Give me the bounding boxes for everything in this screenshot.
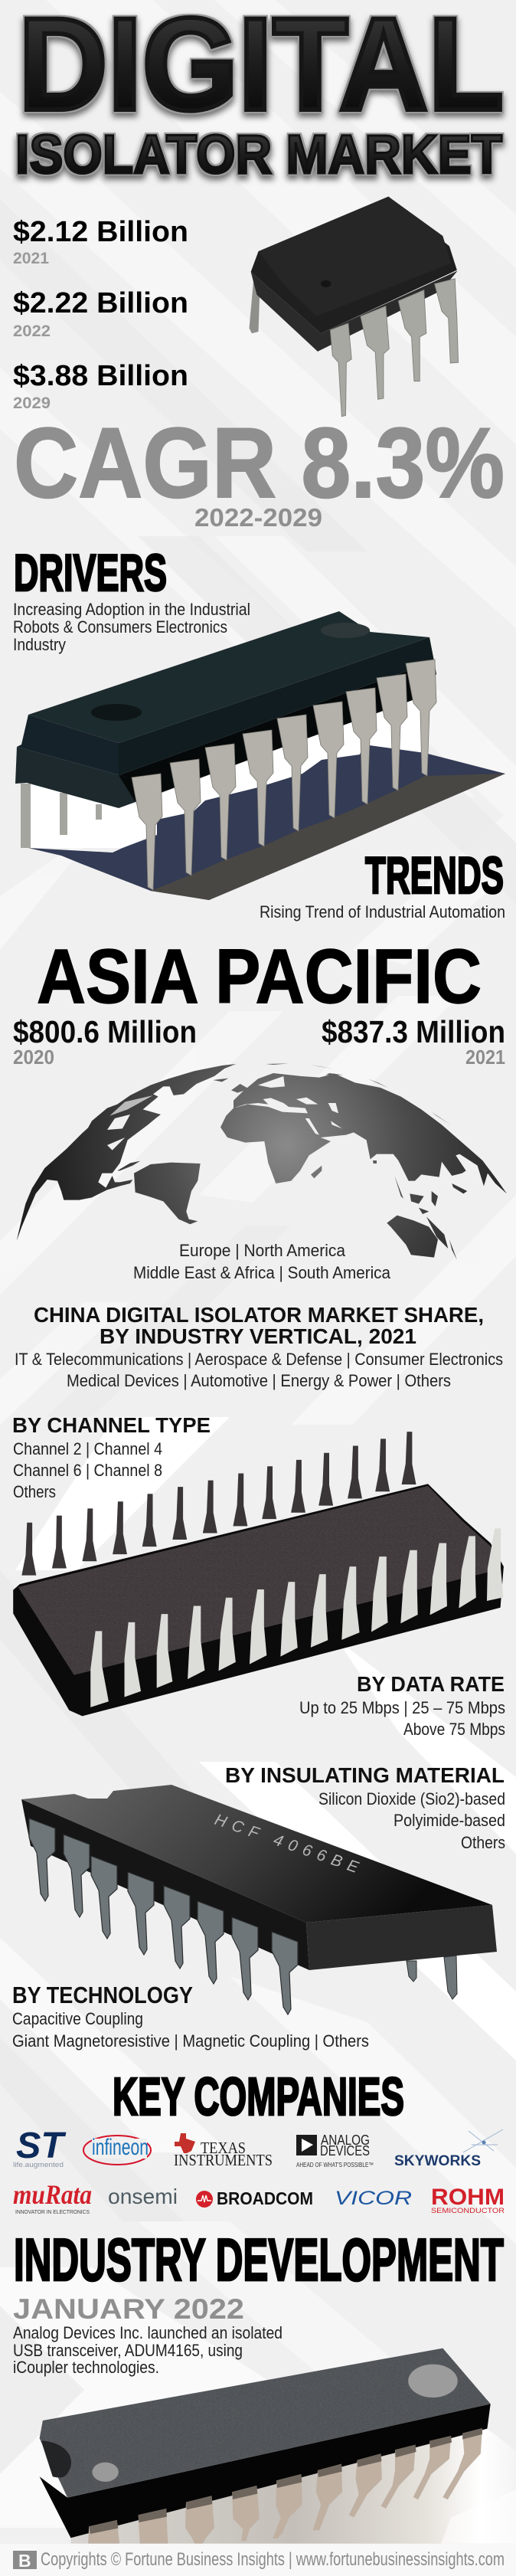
drivers: Robots & Consumers Electronics (13, 617, 227, 637)
logo: Texas Instruments: INSTRUMENTS (174, 2151, 273, 2169)
logo: Analog Devices: AHEAD OF WHAT'S POSSIBLE™ (296, 2161, 374, 2168)
logo: Texas Instruments (174, 2133, 273, 2169)
logo: Infineon: infineon (92, 2135, 149, 2160)
market value stats: 2022 (13, 322, 51, 340)
logo: Rohm: SEMICONDUCTOR (431, 2207, 505, 2215)
shadow (28, 745, 505, 900)
by data rate: BY DATA RATE (357, 1672, 505, 1696)
market value stats: $2.22 Billion (13, 287, 188, 319)
january 2022 development: USB transceiver, ADUM4165, using (13, 2341, 243, 2360)
front pins (90, 1528, 503, 1707)
logo: Infineon (83, 2135, 151, 2165)
back pins (21, 784, 102, 848)
chip: photo DIP (40, 2349, 516, 2544)
China market share: Medical Devices | Automotive | Energy & Power | Others (67, 1371, 451, 1390)
january 2022 development: JANUARY 2022 (13, 2293, 244, 2325)
chip: 28-pin ceramic DIP (13, 1432, 504, 1716)
market value stats: 2029 (13, 394, 51, 412)
logo: Analog Devices (296, 2132, 374, 2168)
lit ground (27, 693, 425, 848)
by channel type: Channel 2 | Channel 4 (13, 1439, 162, 1458)
market value stats: $2.12 Billion (13, 216, 188, 248)
january 2022 development (13, 2293, 282, 2377)
China market share: CHINA DIGITAL ISOLATOR MARKET SHARE, (34, 1303, 484, 1327)
logo: Broadcom: BROADCOM (217, 2188, 313, 2208)
drivers (13, 544, 250, 654)
footer logo (13, 2551, 37, 2571)
chip: 18-pin DIP with shadow (15, 611, 505, 900)
world map (17, 1063, 507, 1260)
logo: ST: life.augmented (13, 2161, 64, 2169)
regions list: Middle East & Africa | South America (133, 1263, 391, 1282)
january 2022 development: Analog Devices Inc. launched an isolated (13, 2323, 282, 2342)
by data rate (299, 1672, 505, 1739)
by insulating material (225, 1763, 505, 1852)
region: Asia Pacific: 2021 (465, 1046, 505, 1069)
by technology: Giant Magnetoresistive | Magnetic Coupling | Others (12, 2031, 369, 2051)
logo: Skyworks (394, 2129, 503, 2169)
CAGR: 2022-2029 (194, 503, 322, 532)
part marking: HCF 4066BE (212, 1811, 361, 1877)
by channel type: Channel 6 | Channel 8 (13, 1461, 162, 1480)
logo: muRata: INNOVATOR IN ELECTRONICS (15, 2208, 90, 2215)
back pins (21, 1432, 416, 1576)
chip: 8-pin DIP (250, 197, 459, 417)
by channel type (12, 1413, 211, 1501)
logo: onsemi: onsemi (108, 2185, 178, 2208)
Americas (17, 1064, 236, 1241)
pins (132, 660, 436, 890)
China market share (15, 1303, 503, 1390)
drivers: Increasing Adoption in the Industrial (13, 600, 250, 619)
logo: Analog Devices: DEVICES (320, 2143, 370, 2159)
pins (88, 2428, 482, 2544)
by insulating material: BY INSULATING MATERIAL (225, 1763, 505, 1787)
by technology: BY TECHNOLOGY (12, 1982, 193, 2008)
China market share: BY INDUSTRY VERTICAL, 2021 (100, 1324, 416, 1348)
regions list (133, 1241, 391, 1282)
by insulating material: Others (461, 1833, 505, 1852)
market value stats: $3.88 Billion (13, 360, 188, 392)
logo: Vicor: VICOR (335, 2188, 412, 2209)
by channel type: BY CHANNEL TYPE (12, 1413, 211, 1437)
logo: muRata: muRata (13, 2179, 92, 2210)
market value stats (13, 216, 188, 412)
drivers: DRIVERS (14, 544, 167, 602)
logo: Skyworks: SKYWORKS (394, 2153, 481, 2169)
chip: HCF 4066BE (21, 1785, 497, 2015)
region: Asia Pacific: $800.6 Million (13, 1014, 197, 1049)
by technology: Capacitive Coupling (12, 2009, 143, 2028)
by insulating material: Polyimide-based (394, 1811, 505, 1830)
logo: Texas Instruments: TEXAS (201, 2139, 246, 2157)
by channel type: Others (13, 1482, 56, 1501)
logo: Rohm: ROHM (431, 2185, 505, 2210)
market value stats: 2021 (13, 250, 49, 267)
trends (260, 846, 505, 921)
logos (13, 2126, 505, 2215)
drivers: Industry (13, 635, 66, 654)
by technology (12, 1982, 369, 2051)
january 2022 development: iCoupler technologies. (13, 2358, 159, 2377)
Afro-Eurasia and Australia (220, 1063, 507, 1260)
footer (0, 2544, 516, 2576)
pins (29, 1818, 298, 2015)
footer logo: B (18, 2551, 31, 2571)
region: Asia Pacific (13, 934, 505, 1069)
logo: Analog Devices: ANALOG (321, 2132, 370, 2148)
regions list: Europe | North America (179, 1241, 346, 1260)
region: Asia Pacific: 2020 (13, 1046, 54, 1069)
logo: ST: ST (16, 2126, 67, 2166)
